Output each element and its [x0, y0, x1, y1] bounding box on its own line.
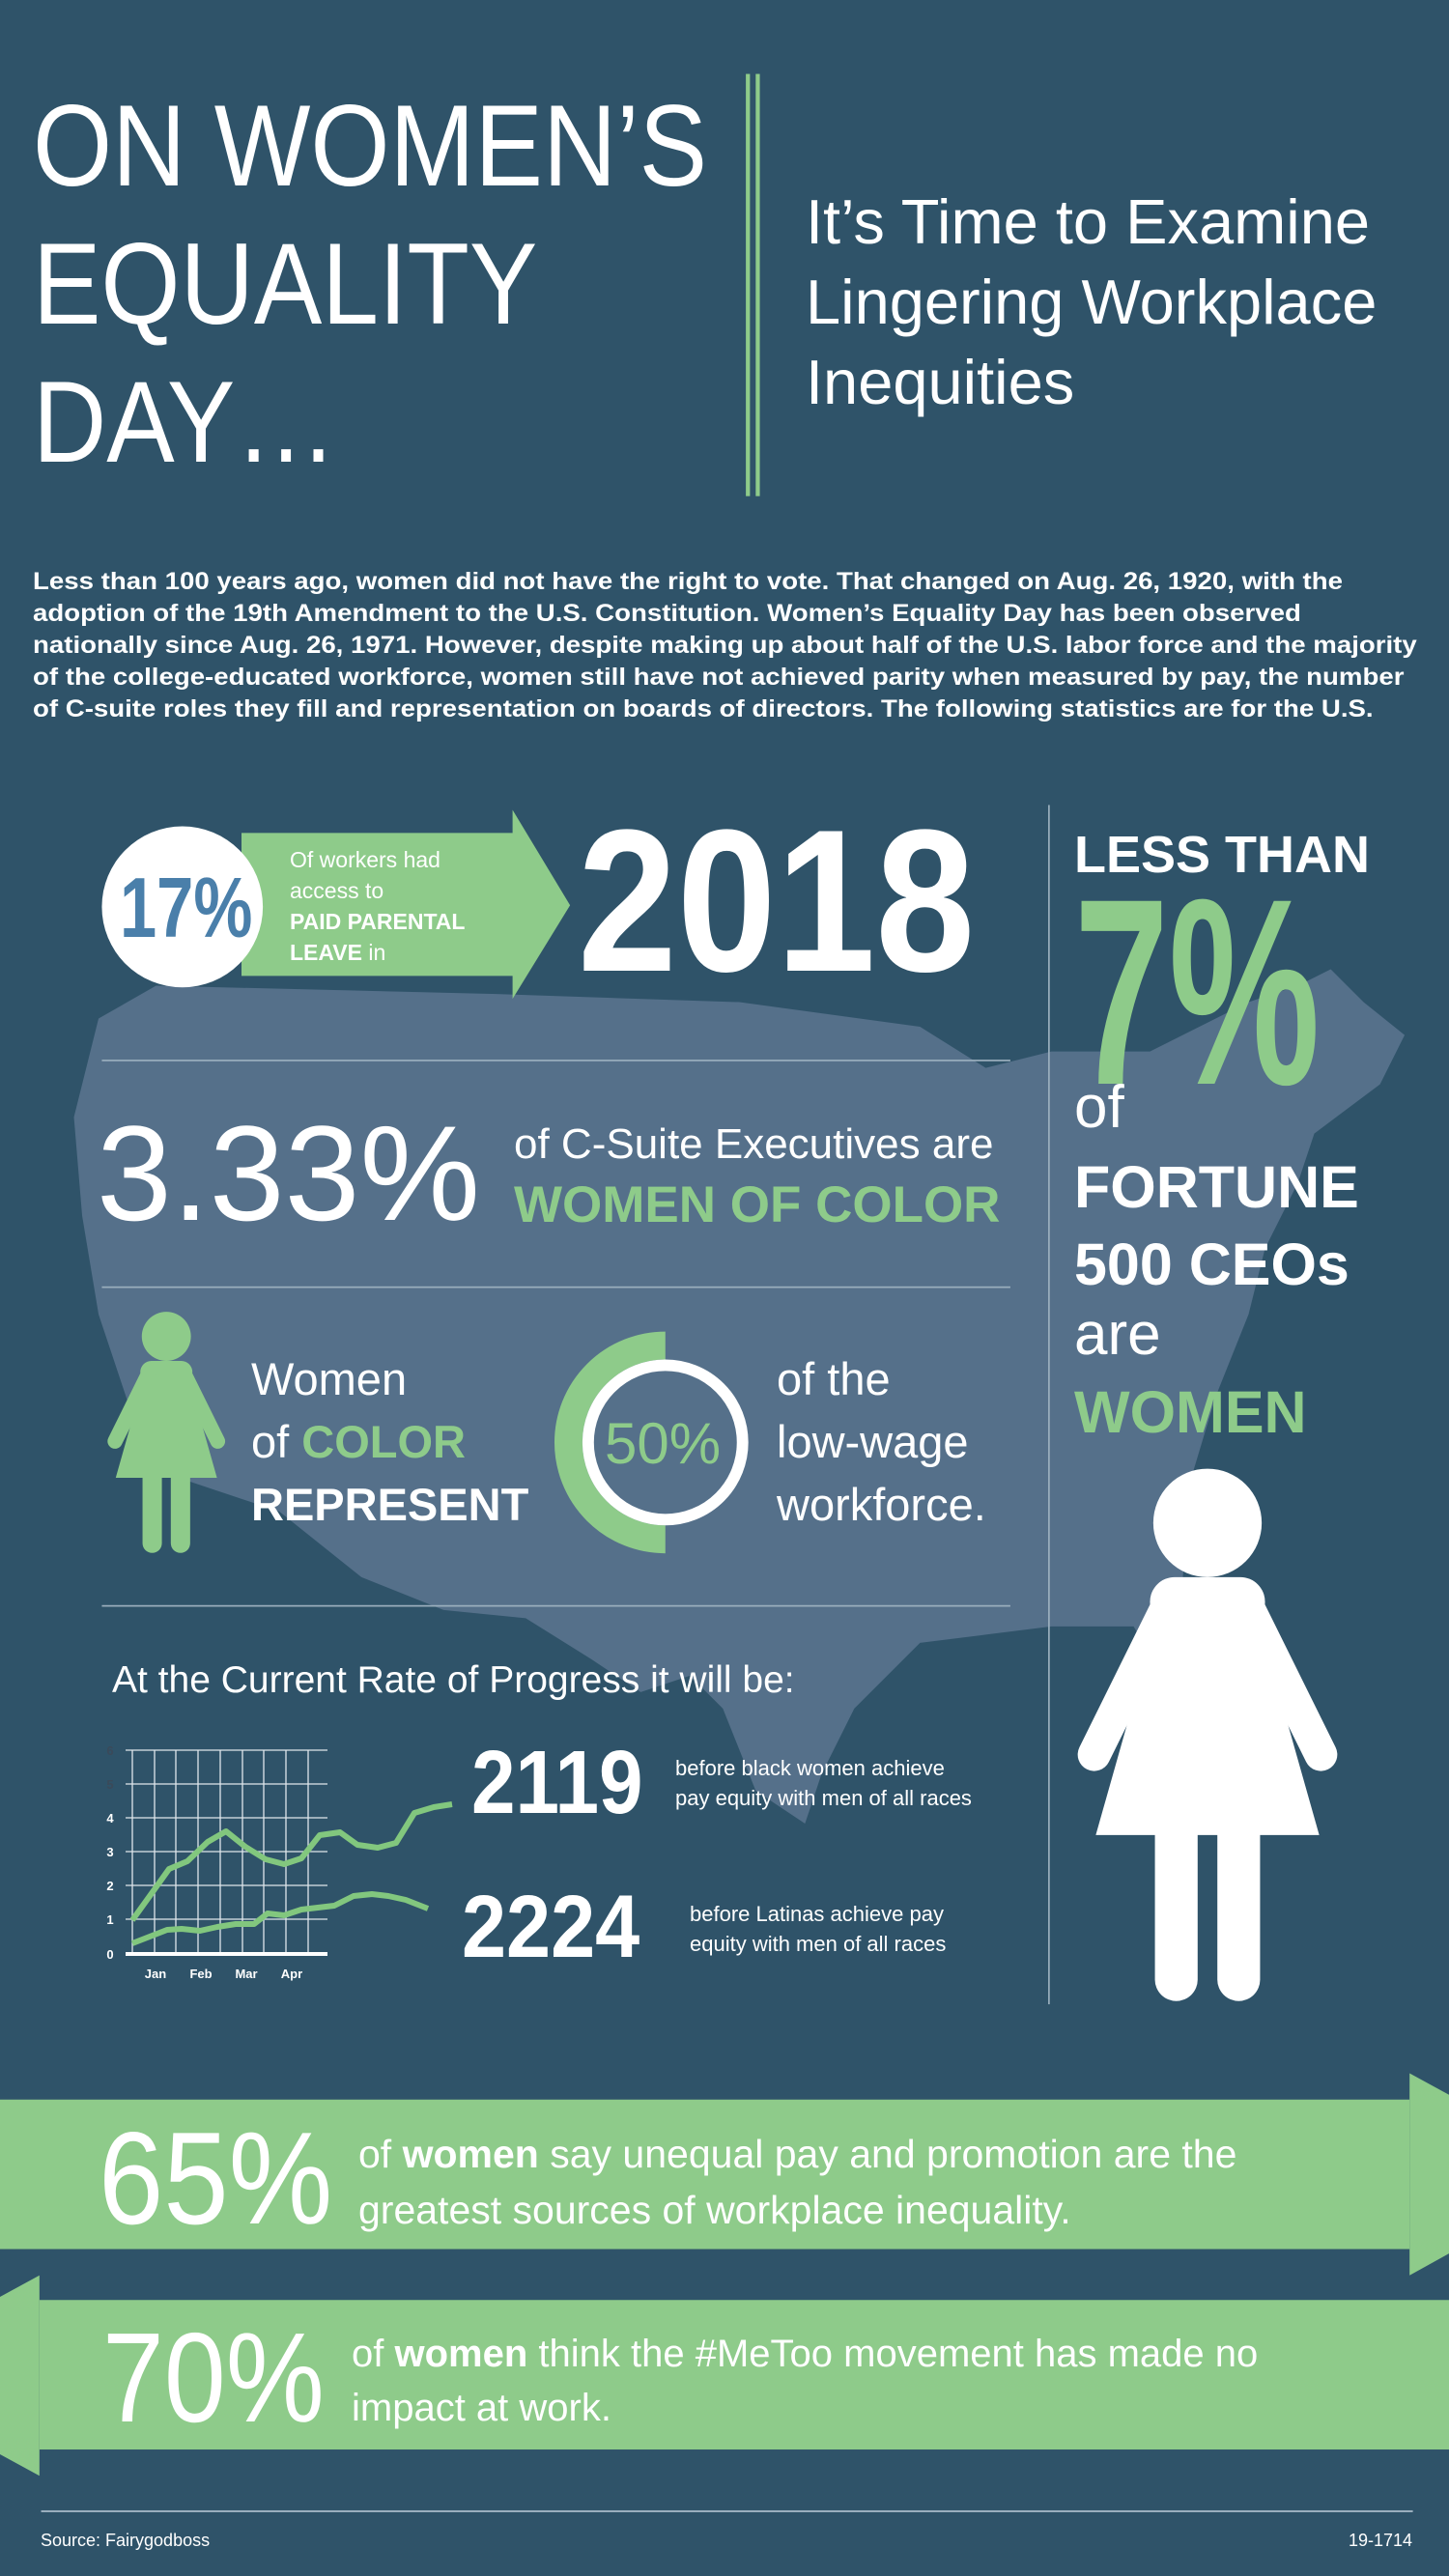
stat: 2119: before black women achieve — [675, 1756, 945, 1780]
line chart: 3 — [106, 1845, 114, 1859]
stat: 17% paid parental leave: Of workers had — [290, 847, 440, 872]
stat: 2119: 2119 — [471, 1732, 643, 1832]
banner: 70%: of women think the #MeToo movement has made no — [352, 2333, 1258, 2375]
icon: small woman — [115, 1312, 217, 1553]
line chart: Mar — [235, 1967, 258, 1981]
line chart: Jan — [145, 1967, 166, 1981]
stat: fortune 500 CEOs: of — [1074, 1074, 1124, 1141]
intro paragraph — [33, 568, 1417, 722]
stat: women of color low-wage: of COLOR — [251, 1416, 466, 1467]
stat: women of color low-wage — [251, 1353, 986, 1530]
stat: fortune 500 CEOs: WOMEN — [1074, 1379, 1307, 1445]
stat: fortune 500 CEOs — [1074, 826, 1370, 1445]
stat: 17% paid parental leave: LEAVE in — [290, 940, 385, 965]
line chart: 1 — [106, 1912, 114, 1927]
stat: fortune 500 CEOs: 7% — [1074, 844, 1320, 1141]
banner arrows — [0, 2074, 1449, 2276]
title: DAY… — [33, 357, 337, 487]
stat: 17% paid parental leave: 2018 — [578, 787, 975, 1014]
stat: fortune 500 CEOs: are — [1074, 1301, 1161, 1368]
footer: source: Source: Fairygodboss — [41, 2531, 210, 2550]
subtitle: Inequities — [806, 347, 1074, 417]
banner: 65%: 65% — [99, 2105, 332, 2251]
intro paragraph: nationally since Aug. 26, 1971. However, despite making up about half of the U.S. labor force and the majority — [33, 632, 1417, 659]
banner: 65% — [99, 2105, 1236, 2251]
stat: 2119 — [471, 1732, 972, 1832]
line chart: 4 — [106, 1811, 114, 1826]
banner: 70%: 70% — [102, 2307, 325, 2449]
stat: fortune 500 CEOs: 500 CEOs — [1074, 1231, 1350, 1297]
stat: 2119: pay equity with men of all races — [675, 1786, 972, 1810]
intro paragraph: adoption of the 19th Amendment to the U.S. Constitution. Women’s Equality Day has been observed — [33, 600, 1301, 627]
stat: 2224: before Latinas achieve pay — [690, 1902, 944, 1926]
stat: 3.33% women of color: of C-Suite Executives are — [514, 1120, 993, 1168]
header divider: double vertical green line — [746, 74, 760, 496]
subtitle — [806, 186, 1377, 417]
map: US silhouette — [74, 970, 1405, 1824]
17% arrow — [101, 810, 570, 999]
stat: 17% paid parental leave: access to — [290, 878, 384, 903]
stat: women of color low-wage: low-wage — [777, 1416, 969, 1467]
intro paragraph: of the college-educated workforce, women still have not achieved parity when measured by pay, the number — [33, 664, 1404, 691]
line chart: 0 — [106, 1947, 114, 1962]
banner: 65%: of women say unequal pay and promotion are the — [358, 2132, 1236, 2176]
line chart: Apr — [281, 1967, 302, 1981]
stat: women of color low-wage: REPRESENT — [251, 1479, 528, 1530]
stat: women of color low-wage: Women — [251, 1353, 407, 1404]
line chart: Feb — [189, 1967, 213, 1981]
footer: code: 19-1714 — [1349, 2531, 1412, 2550]
banner: 70%: impact at work. — [352, 2387, 611, 2429]
heading: current rate of progress: At the Current Rate of Progress it will be: — [112, 1659, 795, 1701]
stat: 3.33% women of color — [97, 1097, 1000, 1249]
intro paragraph: of C-suite roles they fill and representation on boards of directors. The following statistics are for the U.S. — [33, 695, 1374, 722]
stat: fortune 500 CEOs: FORTUNE — [1074, 1154, 1359, 1220]
stat: 2224: equity with men of all races — [690, 1932, 946, 1956]
stat: 17% paid parental leave: PAID PARENTAL — [290, 909, 465, 934]
banner: 65%: greatest sources of workplace inequality. — [358, 2188, 1071, 2232]
stat: 3.33% women of color: 3.33% — [97, 1097, 480, 1249]
stat: 17% paid parental leave: 17% — [120, 860, 252, 955]
stat: women of color low-wage: of the — [777, 1353, 891, 1404]
stat: 2224 — [462, 1878, 946, 1976]
stat: 3.33% women of color: WOMEN OF COLOR — [514, 1176, 1000, 1233]
subtitle: It’s Time to Examine — [806, 186, 1370, 257]
line chart — [106, 1743, 452, 1981]
stat: women of color low-wage: workforce. — [777, 1479, 986, 1530]
title: EQUALITY — [33, 219, 537, 349]
line chart: 2 — [106, 1879, 114, 1893]
line chart: 6 — [106, 1743, 114, 1758]
stat: 17% paid parental leave — [120, 787, 975, 1014]
title — [33, 81, 707, 487]
title: ON WOMEN’S — [33, 81, 707, 211]
line chart: 5 — [106, 1777, 114, 1792]
intro paragraph: Less than 100 years ago, women did not have the right to vote. That changed on Aug. 26, 1920, with the — [33, 568, 1343, 595]
horizontal dividers — [42, 805, 1413, 2512]
stat: women of color low-wage: 50% — [605, 1411, 721, 1476]
stat: fortune 500 CEOs: LESS THAN — [1074, 826, 1370, 884]
icon: large woman — [1094, 1469, 1321, 2001]
donut: 50% — [568, 1345, 743, 1540]
stat: 2224: 2224 — [462, 1878, 639, 1976]
banner: 70% — [102, 2307, 1258, 2449]
subtitle: Lingering Workplace — [806, 267, 1377, 337]
